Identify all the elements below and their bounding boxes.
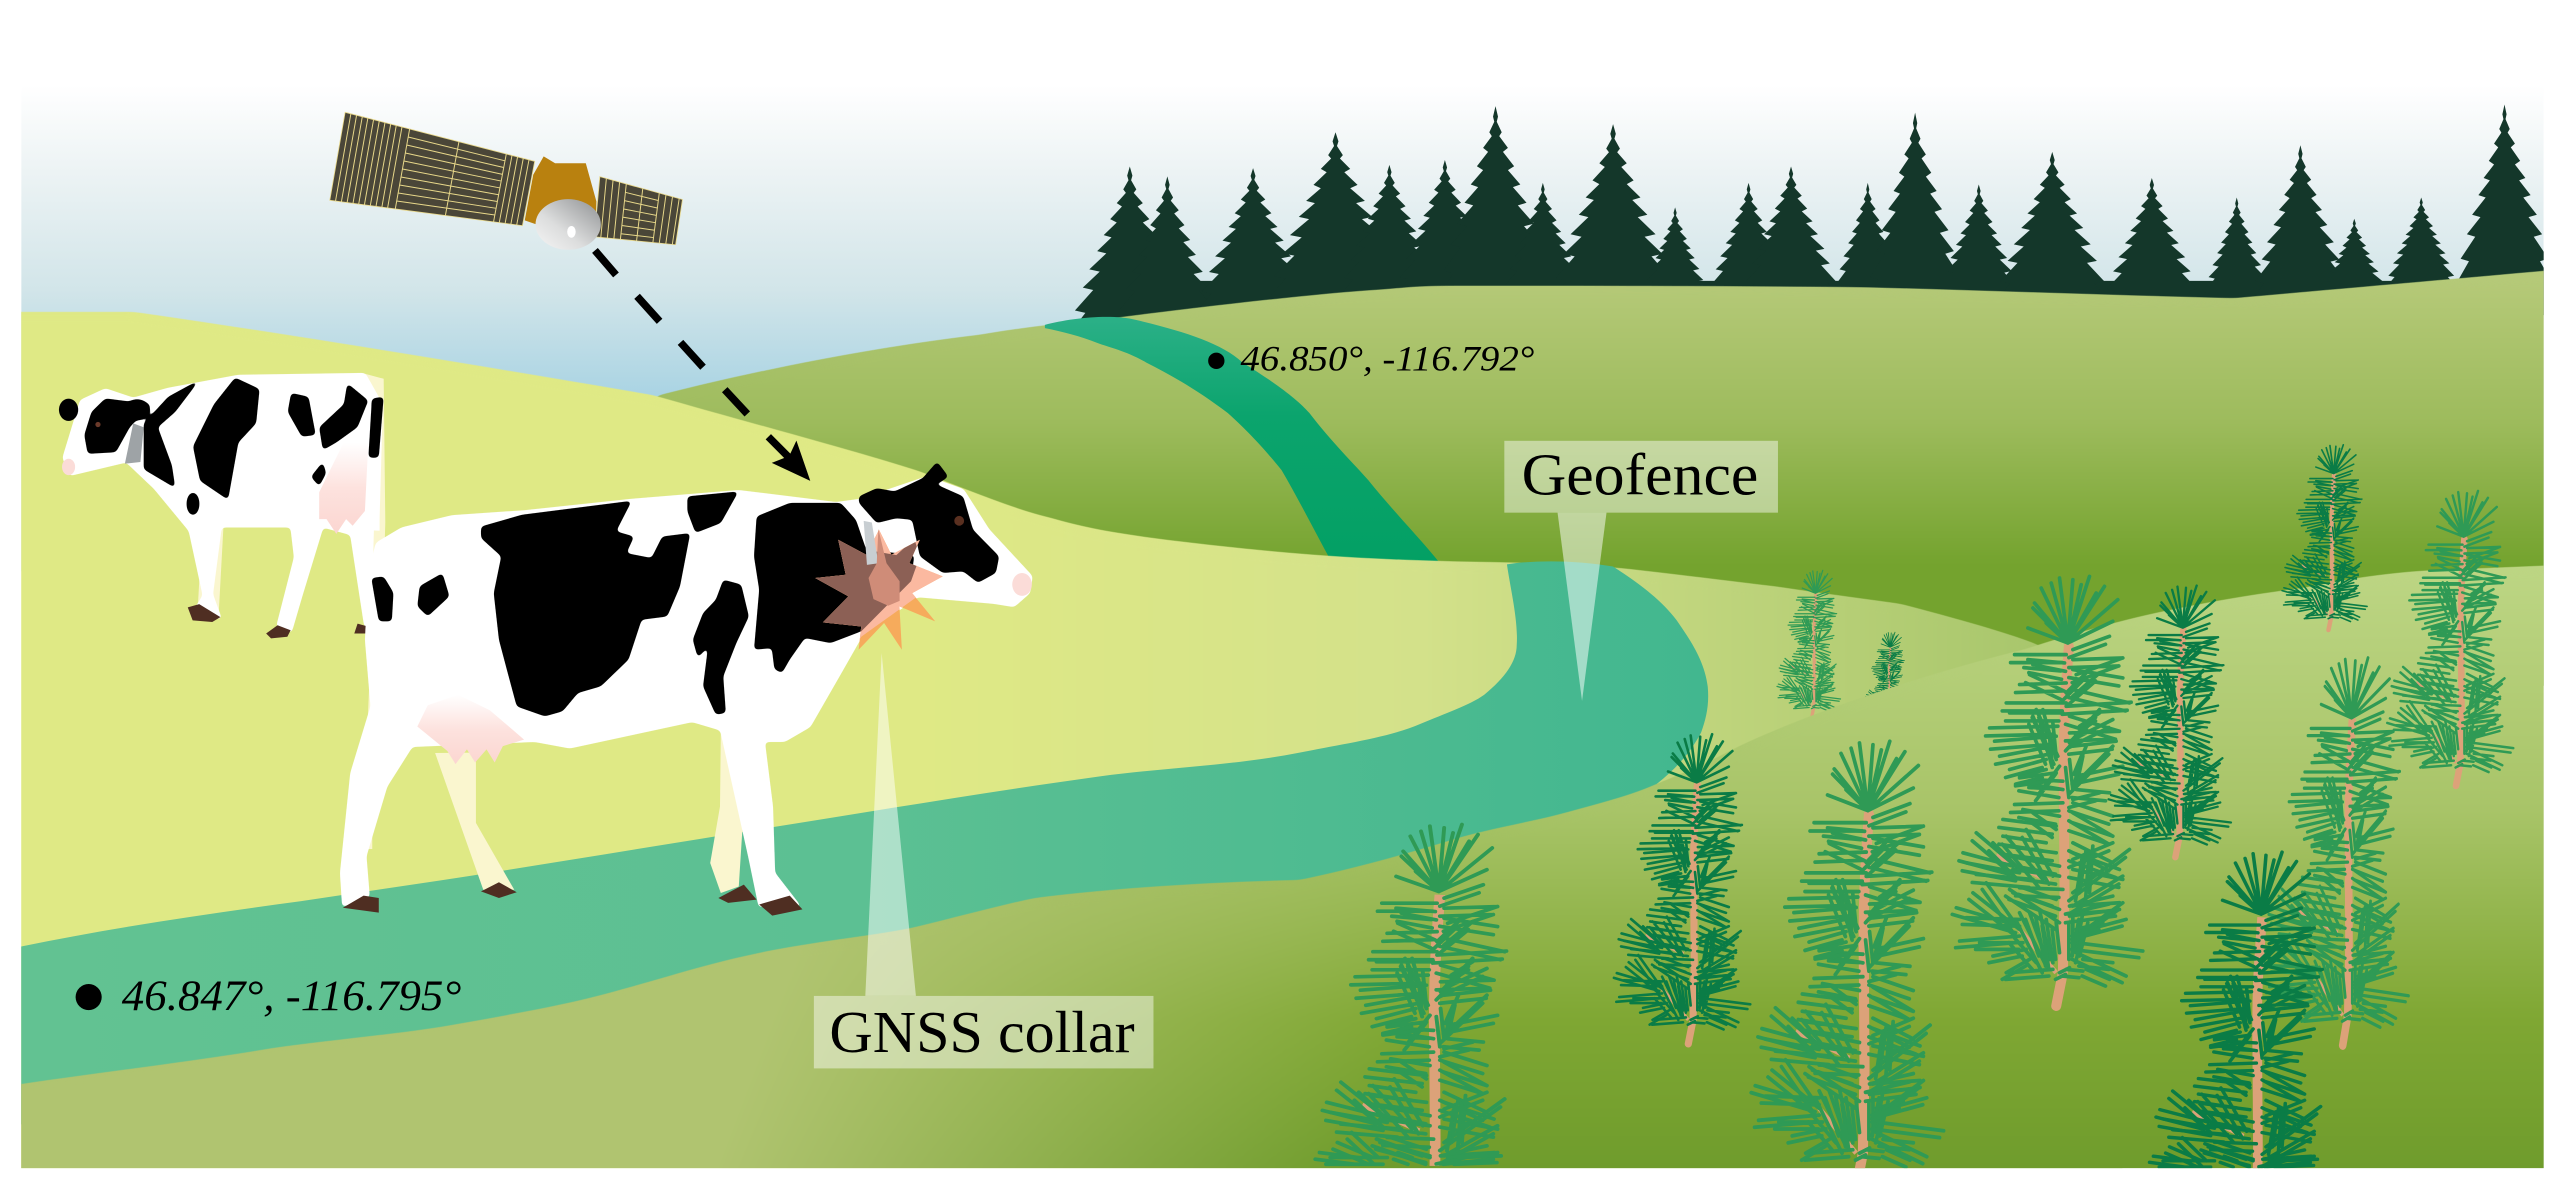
background cow: [59, 374, 385, 638]
far geofence band: [1045, 317, 1440, 563]
near geofence band: [0, 561, 1708, 1127]
small background pine: [1777, 570, 1841, 718]
pine tree 6: [2264, 658, 2408, 1045]
satellite dish: [536, 199, 601, 250]
pine tree 9: [2282, 445, 2367, 630]
dashed signal arrow: [595, 250, 810, 481]
GNSS collar starburst: [815, 521, 943, 650]
callout: Geofence: [1504, 441, 1778, 701]
satellite body: [525, 156, 596, 224]
satellite: [330, 112, 682, 250]
small background dark pine: [1865, 632, 1905, 696]
solar panel right: [594, 177, 682, 245]
coordinate label: 46.850, -116.792: 46.850°, -116.792°: [1240, 339, 1534, 379]
sky: [21, 82, 2544, 571]
pine tree 4: [1952, 576, 2143, 1006]
far hill: [653, 269, 2560, 686]
pine tree 5: [2109, 586, 2231, 857]
callout: Geofence: Geofence: [1522, 443, 1758, 508]
callout: GNSS collar: GNSS collar: [829, 1000, 1135, 1065]
distant conifer tree line: [1070, 104, 2553, 363]
foreground hill: [0, 565, 2560, 1200]
pine tree 7: [2150, 852, 2322, 1169]
near pasture hill: [0, 312, 2122, 1200]
callout: GNSS collar: [814, 653, 1153, 1068]
pine tree 2: [1614, 734, 1750, 1044]
foreground cow: [341, 462, 1032, 916]
solar panel left: [330, 112, 535, 226]
pine tree 1: [1315, 825, 1506, 1166]
pine tree 3: [1751, 741, 1944, 1188]
pine tree 8: [2387, 491, 2513, 786]
coordinate label: 46.847, -116.795: 46.847°, -116.795°: [122, 972, 461, 1020]
coordinate label: 46.850, -116.792: [1208, 346, 1534, 376]
coordinate label: 46.847, -116.795: [76, 981, 461, 1017]
